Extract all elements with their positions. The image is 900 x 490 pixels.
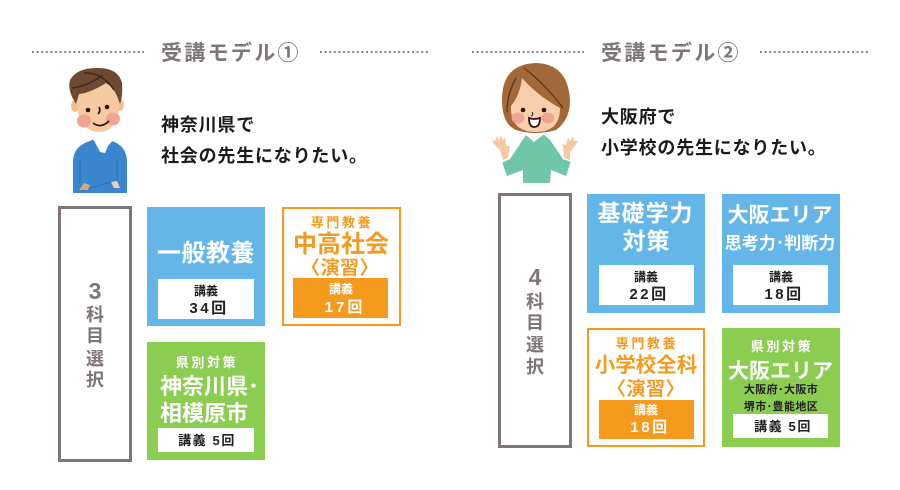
card: general education [147, 207, 265, 326]
heading: model 2: 受講モデル② [601, 41, 741, 65]
card: basic ability: 対策 [622, 228, 670, 254]
card: prefecture Kanagawa: 神奈川県･ [160, 374, 259, 399]
panel: model 1 [32, 41, 428, 460]
card: specialist elementary [588, 329, 704, 446]
icon: woman [492, 63, 578, 183]
heading: model 1: 受講モデル① [161, 41, 301, 65]
card: specialist elementary: 〈演習〉 [607, 378, 685, 400]
label: 4 subjects: 4 [529, 264, 542, 290]
label: 3 subjects: 択 [86, 370, 104, 390]
card: specialist elementary: 18回 [630, 419, 670, 436]
label: 3 subjects [60, 208, 130, 460]
label: 3 subjects: 目 [86, 326, 104, 346]
card: prefecture Kanagawa: 相模原市 [160, 401, 248, 426]
card: prefecture Kanagawa: 県別対策 [176, 355, 238, 370]
card: specialist social studies: 中高社会 [293, 231, 389, 258]
card: Osaka thinking: 18回 [764, 286, 804, 303]
card: general education: 一般教養 [157, 240, 255, 267]
card: specialist social studies: 〈演習〉 [301, 257, 379, 279]
text: goal 2: 小学校の先生になりたい。 [601, 137, 827, 158]
label: 4 subjects: 目 [526, 313, 544, 333]
card: specialist social studies: 講義 [329, 281, 353, 296]
card: prefecture Kanagawa: 講義 5回 [178, 433, 236, 448]
card: Osaka thinking: 大阪エリア [728, 204, 832, 227]
card: prefecture Osaka: 大阪府･大阪市 [744, 382, 818, 396]
card: specialist social studies: 17回 [325, 299, 365, 316]
label: 4 subjects: 選 [526, 335, 544, 355]
text: goal 1: 神奈川県で [161, 115, 255, 135]
label: 4 subjects: 択 [526, 357, 544, 377]
card: basic ability: 講義 [634, 269, 658, 284]
card: general education: 34回 [189, 300, 229, 317]
card: specialist social studies: 専門教養 [311, 215, 373, 230]
card: specialist social studies [283, 208, 400, 325]
card: Osaka thinking [722, 194, 840, 313]
label: 3 subjects: 科 [86, 305, 104, 325]
card: prefecture Osaka [722, 328, 840, 447]
card: basic ability: 基礎学力 [598, 200, 694, 226]
card: specialist elementary: 専門教養 [616, 336, 678, 351]
card: specialist elementary: 小学校全科 [595, 354, 697, 377]
card: specialist elementary: 講義 [634, 402, 658, 417]
label: 3 subjects: 選 [86, 349, 104, 369]
text: goal 2: 大阪府で [601, 107, 676, 127]
card: prefecture Kanagawa [147, 342, 265, 460]
panel: model 2 [472, 41, 868, 447]
card: general education: 講義 [194, 283, 218, 298]
card: prefecture Osaka: 大阪エリア [728, 360, 833, 383]
label: 4 subjects [500, 194, 570, 446]
card: Osaka thinking: 思考力･判断力 [725, 234, 835, 253]
card: prefecture Osaka: 県別対策 [751, 339, 813, 354]
card: basic ability [587, 194, 705, 313]
label: 3 subjects: 3 [89, 278, 101, 304]
card: prefecture Osaka: 堺市･豊能地区 [744, 399, 818, 413]
card: basic ability: 22回 [629, 286, 669, 303]
card: prefecture Osaka: 講義 5回 [754, 419, 812, 434]
text: goal 1: 社会の先生になりたい。 [161, 146, 368, 166]
icon: man [69, 68, 127, 193]
label: 4 subjects: 科 [526, 292, 544, 312]
card: Osaka thinking: 講義 [769, 269, 793, 284]
